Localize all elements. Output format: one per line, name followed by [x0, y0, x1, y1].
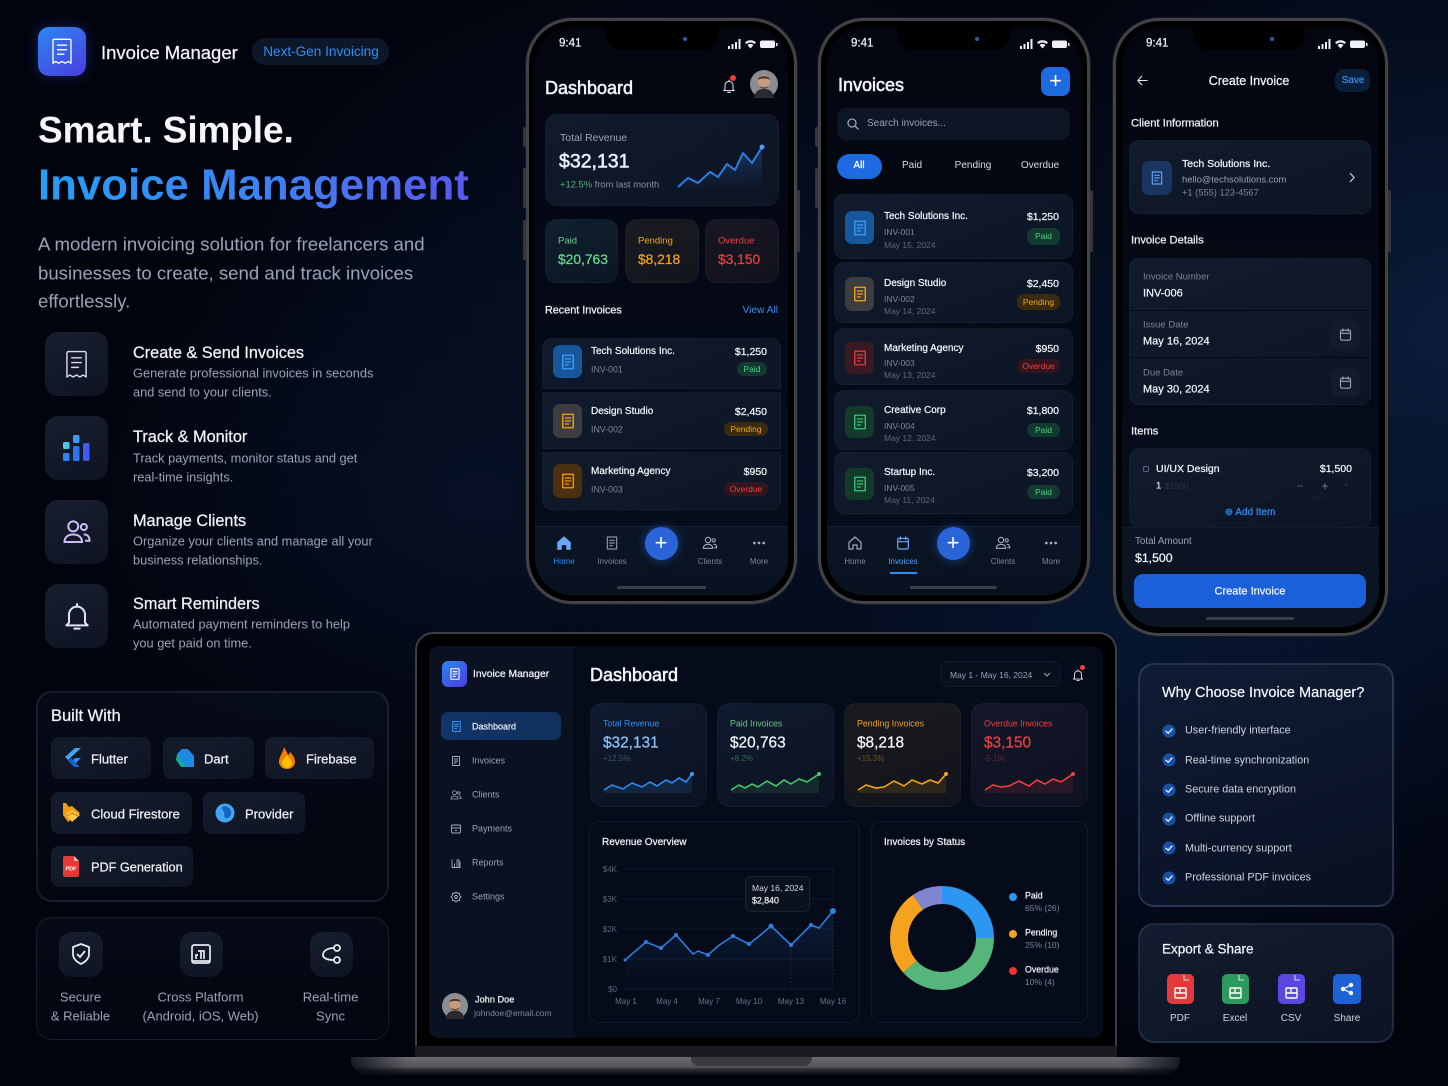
- invoice row: INV-001: [591, 365, 623, 375]
- create invoice button: [1134, 574, 1366, 608]
- highlight: real-time sync: Sync: [316, 1008, 345, 1023]
- invoice row: $950: [1036, 343, 1059, 355]
- invoice row: $1,250: [735, 346, 767, 358]
- highlight: cross platform: Cross Platform: [158, 989, 243, 1004]
- items card: ⊕ Add Item: [1225, 507, 1275, 518]
- search bar: [837, 108, 1070, 140]
- invoice row: Creative Corp: [884, 405, 946, 416]
- chip: Firebase: Firebase: [306, 752, 357, 766]
- invoice details card: INV-006: [1143, 288, 1183, 300]
- save pill: [1335, 69, 1370, 92]
- line chart: [602, 865, 847, 1006]
- create invoice button: Create Invoice: [1215, 586, 1285, 598]
- chip: Flutter: Flutter: [91, 752, 128, 766]
- invoice row: [542, 392, 781, 449]
- sidebar: Dashboard: [472, 722, 516, 732]
- donut legend: 65% (26): [1025, 903, 1060, 913]
- line chart: May 7: [698, 997, 720, 1006]
- invoice row: Paid: [743, 364, 760, 374]
- invoice row: INV-002: [884, 294, 915, 304]
- brand name: Invoice Manager: [101, 42, 238, 63]
- benefit list: User-friendly interface: [1185, 725, 1291, 737]
- invoice row: INV-001: [884, 227, 915, 237]
- client card: [1129, 140, 1371, 214]
- benefit list: Professional PDF invoices: [1185, 872, 1311, 884]
- headline: Smart. Simple.: [38, 110, 294, 150]
- feature: smart reminders: Smart Reminders: [133, 595, 260, 613]
- export: CSV: [1278, 974, 1305, 1024]
- invoice row: Tech Solutions Inc.: [884, 211, 968, 222]
- add button: +: [1049, 68, 1062, 93]
- donut legend: Paid: [1025, 891, 1043, 901]
- invoice details card: Invoice Number: [1143, 271, 1210, 282]
- invoice row: INV-003: [884, 358, 915, 368]
- items card: ◦: [1344, 480, 1348, 491]
- feature: smart reminders: [45, 584, 350, 651]
- chart panel: invoices by status: Invoices by Status: [884, 837, 965, 848]
- feature: manage clients: Manage Clients: [133, 512, 246, 530]
- chip: Provider: Provider: [245, 806, 293, 822]
- invoice row: Design Studio: [884, 278, 946, 289]
- feature: smart reminders: Automated payment reminders to help: [133, 617, 350, 632]
- panel heading: Export & Share: [1162, 941, 1254, 956]
- export: CSV: CSV: [1281, 1013, 1301, 1024]
- sidebar: Payments: [472, 824, 512, 834]
- sidebar: Invoice Manager: [473, 669, 549, 680]
- laptop: base: [351, 1046, 1180, 1075]
- invoice row: [834, 262, 1073, 323]
- chip: PDF Generation: PDF: [66, 866, 76, 872]
- export: Excel: [1222, 974, 1249, 1024]
- invoice details card: May 16, 2024: [1143, 336, 1210, 348]
- revenue card: Total Revenue: [560, 132, 627, 144]
- phone: dashboard screen: [526, 18, 797, 604]
- invoice details card: May 30, 2024: [1143, 384, 1210, 396]
- line chart: May 4: [656, 997, 678, 1006]
- invoice row: May 11, 2024: [884, 495, 935, 505]
- panel: export and share: [1138, 923, 1394, 1043]
- status bar: [1146, 37, 1368, 49]
- chip: PDF Generation: [51, 846, 193, 887]
- tagline pill: [252, 38, 389, 65]
- feature: manage clients: business relationships.: [133, 553, 262, 568]
- page title: Dashboard: [590, 665, 678, 685]
- stat: overdue: [705, 219, 779, 283]
- date range picker: May 1 - May 16, 2024: [950, 670, 1032, 680]
- stat: paid: [545, 219, 618, 283]
- chart panel: invoices by status: [871, 821, 1088, 1023]
- highlight: cross platform: (Android, iOS, Web): [142, 1008, 259, 1023]
- client card: Tech Solutions Inc.: [1182, 158, 1270, 170]
- invoice row: May 12, 2024: [884, 433, 936, 443]
- stat card: total revenue: $32,131: [603, 734, 659, 751]
- tagline pill: Next-Gen Invoicing: [263, 44, 379, 59]
- stat card: overdue invoices: [971, 703, 1088, 807]
- revenue card: +12.5% from last month: [560, 178, 659, 189]
- feature: create and send: Generate professional invoices in seconds: [133, 366, 373, 381]
- sidebar: Clients: [472, 790, 500, 800]
- bottom navigation: More: [750, 557, 768, 566]
- status bar: 9:41: [1146, 37, 1168, 49]
- chip: PDF Generation: PDF Generation: [91, 861, 183, 875]
- invoice row: Design Studio: [591, 406, 653, 417]
- feature: track and monitor: Track payments, monitor status and get: [133, 451, 357, 466]
- phone: invoices screen: [818, 18, 1090, 604]
- bottom navigation: Invoices: [597, 557, 627, 566]
- revenue card: [545, 114, 779, 206]
- sidebar: Reports: [472, 858, 504, 868]
- header: logo and badge: [30, 19, 389, 84]
- client card: hello@techsolutions.com: [1182, 173, 1286, 184]
- chart panel: revenue overview: Revenue Overview: [602, 837, 686, 848]
- donut legend: 25% (10): [1025, 940, 1060, 950]
- donut legend: Overdue: [1025, 965, 1059, 975]
- bottom navigation: [827, 526, 1081, 595]
- export: PDF: [1167, 974, 1194, 1024]
- bottom navigation: +: [655, 530, 667, 555]
- donut chart: [890, 886, 994, 990]
- revenue sparkline: [677, 144, 764, 188]
- invoice details card: [1129, 258, 1371, 405]
- total and action footer: [1122, 527, 1379, 627]
- invoice row: INV-005: [884, 483, 915, 493]
- stat card: paid invoices: $20,763: [730, 734, 786, 751]
- section heading: View All: [742, 305, 778, 316]
- stat: paid: Paid: [558, 235, 577, 246]
- notification bell: [1072, 665, 1085, 681]
- sidebar: [429, 646, 573, 1038]
- benefit list: [1162, 724, 1311, 884]
- line chart: May 1: [615, 997, 637, 1006]
- invoice row: [542, 338, 781, 389]
- bottom navigation: [535, 526, 788, 595]
- donut legend: Pending: [1025, 928, 1057, 938]
- chip: Firebase: [265, 737, 374, 779]
- highlight: secure: [51, 932, 110, 1023]
- sidebar active item: [441, 712, 561, 740]
- line chart: $1K: [603, 955, 618, 964]
- donut legend: [1009, 891, 1060, 987]
- filter tabs: Paid: [902, 160, 922, 171]
- screen title: Create Invoice: [1209, 74, 1289, 88]
- date range picker: [940, 661, 1061, 687]
- invoice row: [834, 328, 1073, 385]
- stat: pending: $8,218: [638, 252, 680, 267]
- items card: $1,500: [1320, 463, 1352, 475]
- screen title: Invoices: [838, 75, 904, 95]
- invoice row: May 14, 2024: [884, 306, 936, 316]
- line chart: $4K: [603, 865, 618, 874]
- line chart: May 13: [778, 997, 805, 1006]
- items card: −: [1296, 479, 1304, 493]
- headline: Invoice Management: [38, 161, 469, 210]
- chip: Dart: Dart: [204, 752, 229, 766]
- chip: Dart: [163, 737, 254, 779]
- filter tabs: Overdue: [1021, 160, 1059, 171]
- feature: create and send: Create & Send Invoices: [133, 344, 304, 362]
- heading: invoice details: Invoice Details: [1131, 234, 1204, 246]
- stat card: overdue invoices: Overdue Invoices: [984, 719, 1052, 729]
- line chart: $3K: [603, 895, 618, 904]
- user profile: [442, 993, 468, 1019]
- notification bell: [723, 75, 736, 93]
- benefit list: Secure data encryption: [1185, 784, 1296, 796]
- invoice row: $1,800: [1027, 405, 1059, 417]
- invoice row: INV-002: [591, 425, 623, 435]
- invoice row: Pending: [1023, 297, 1054, 307]
- export: Share: Share: [1334, 1013, 1360, 1024]
- stat: pending: Pending: [638, 235, 673, 246]
- intro paragraph: [38, 234, 425, 312]
- sidebar: johndoe@email.com: [474, 1008, 552, 1018]
- feature: smart reminders: you get paid on time.: [133, 636, 252, 651]
- line chart: May 10: [736, 997, 763, 1006]
- invoice row: INV-004: [884, 421, 915, 431]
- stat card: overdue invoices: -5.1%: [984, 754, 1005, 763]
- line chart: $0: [608, 985, 618, 994]
- items card: UI/UX Design: [1156, 463, 1220, 475]
- invoice row: [542, 452, 781, 510]
- bottom navigation: Home: [553, 557, 575, 566]
- bottom navigation: +: [947, 530, 959, 555]
- chart tooltip: [745, 876, 810, 912]
- stat card: pending invoices: +15.3%: [857, 754, 884, 763]
- items card: [1129, 448, 1371, 528]
- invoice row: $1,250: [1027, 211, 1059, 223]
- chip: Flutter: [51, 737, 151, 779]
- chip: Cloud Firestore: Cloud Firestore: [91, 806, 180, 822]
- chart tooltip: May 16, 2024: [752, 883, 804, 893]
- invoice row: Tech Solutions Inc.: [591, 346, 675, 357]
- benefit list: Offline support: [1185, 813, 1255, 825]
- feature: create and send: [45, 332, 373, 400]
- stat: pending: [625, 219, 699, 283]
- client card: +1 (555) 123-4567: [1182, 187, 1259, 197]
- invoice details card: Due Date: [1143, 367, 1183, 378]
- highlight: real-time sync: Real-time: [303, 989, 358, 1004]
- status bar: 9:41: [559, 37, 581, 49]
- bottom navigation: Invoices: [888, 557, 918, 566]
- stat card: paid invoices: Paid Invoices: [730, 719, 782, 729]
- feature: create and send: and send to your clients.: [133, 385, 272, 400]
- intro paragraph: A modern invoicing solution for freelancers and: [38, 234, 425, 255]
- invoice row: $950: [744, 466, 767, 478]
- feature: track and monitor: real-time insights.: [133, 470, 233, 485]
- stat card: total revenue: Total Revenue: [603, 719, 659, 729]
- chip: Cloud Firestore: [51, 792, 192, 834]
- back arrow: [1137, 76, 1148, 86]
- highlight: real-time sync: [303, 932, 358, 1023]
- benefit list: Real-time synchronization: [1185, 755, 1309, 767]
- invoice row: [834, 390, 1073, 450]
- invoice row: [834, 194, 1073, 259]
- save pill: Save: [1342, 75, 1364, 86]
- invoice row: INV-003: [591, 485, 623, 495]
- invoice row: Marketing Agency: [591, 466, 670, 477]
- heading: client information: Client Information: [1131, 117, 1219, 129]
- export: Excel: Excel: [1223, 1013, 1247, 1024]
- stat card: pending invoices: Pending Invoices: [857, 719, 924, 729]
- add button: [1041, 67, 1070, 96]
- export: Share: [1333, 974, 1361, 1024]
- highlight: cross platform: [142, 932, 259, 1023]
- invoice row: $2,450: [1027, 278, 1059, 290]
- invoice row: Paid: [1035, 425, 1052, 435]
- invoice row: $3,200: [1027, 467, 1059, 479]
- stat card: overdue invoices: $3,150: [984, 734, 1031, 751]
- user avatar: [750, 70, 778, 98]
- stat card: pending invoices: [844, 703, 961, 807]
- panel heading: Why Choose Invoice Manager?: [1162, 685, 1364, 701]
- bottom navigation: Home: [844, 557, 866, 566]
- invoice row: Startup Inc.: [884, 467, 935, 478]
- section heading: Recent Invoices: [545, 305, 622, 317]
- invoice row: Overdue: [730, 484, 762, 494]
- phone: create invoice screen: [1113, 18, 1388, 636]
- donut legend: 10% (4): [1025, 977, 1055, 987]
- panel: built with: [36, 691, 389, 902]
- feature: track and monitor: [45, 416, 358, 485]
- stat: paid: $20,763: [558, 252, 608, 267]
- total and action footer: Total Amount: [1135, 536, 1192, 547]
- status bar: 9:41: [851, 37, 873, 49]
- stat card: pending invoices: $8,218: [857, 734, 904, 751]
- invoice row: $2,450: [735, 406, 767, 418]
- total and action footer: $1,500: [1135, 551, 1173, 565]
- feature: manage clients: [45, 500, 373, 568]
- stat card: total revenue: +12.5%: [603, 754, 630, 763]
- invoice row: May 15, 2024: [884, 240, 936, 250]
- headline: [38, 110, 469, 210]
- filter tabs: Pending: [955, 160, 991, 171]
- sidebar: Invoices: [472, 756, 505, 766]
- stat card: paid invoices: [717, 703, 834, 807]
- chip: Provider: [203, 792, 305, 834]
- stat card: paid invoices: +8.2%: [730, 754, 753, 763]
- intro paragraph: businesses to create, send and track invoices: [38, 263, 413, 284]
- invoice details card: Issue Date: [1143, 319, 1188, 330]
- sidebar: Settings: [472, 892, 505, 902]
- highlight: secure: Secure: [60, 989, 101, 1004]
- bottom navigation: More: [1042, 557, 1060, 566]
- feature: manage clients: Organize your clients and manage all your: [133, 534, 373, 549]
- panel: why choose: [1138, 663, 1394, 907]
- laptop: dashboard screen: [415, 632, 1117, 1046]
- heading: items: Items: [1131, 425, 1158, 437]
- invoice row: Marketing Agency: [884, 343, 964, 354]
- line chart: $2K: [603, 925, 618, 934]
- intro paragraph: effortlessly.: [38, 291, 130, 312]
- screen title: Dashboard: [545, 78, 633, 98]
- invoice row: Paid: [1035, 487, 1052, 497]
- export: PDF: PDF: [1170, 1013, 1190, 1024]
- invoice row: Paid: [1035, 231, 1052, 241]
- chart panel: revenue overview: [589, 821, 860, 1023]
- bottom navigation: Clients: [698, 557, 722, 566]
- bottom navigation: Clients: [991, 557, 1015, 566]
- app logo icon: [38, 27, 86, 76]
- sidebar logo: [442, 661, 467, 687]
- stat: overdue: $3,150: [718, 252, 760, 267]
- chart tooltip: $2,840: [752, 896, 779, 906]
- status bar: [559, 37, 778, 49]
- invoice row: Overdue: [1022, 361, 1055, 371]
- feature: track and monitor: Track & Monitor: [133, 428, 247, 446]
- search bar: Search invoices...: [867, 118, 946, 129]
- panel: highlights: [36, 917, 389, 1040]
- filter tabs: [837, 154, 1059, 179]
- stat: overdue: Overdue: [718, 235, 754, 246]
- revenue card: $32,131: [559, 150, 630, 172]
- status bar: [851, 37, 1070, 49]
- items card: $1500: [1165, 481, 1189, 491]
- invoice row: Pending: [730, 424, 762, 434]
- line chart: May 16: [820, 997, 847, 1006]
- sidebar: John Doe: [475, 994, 514, 1004]
- invoice row: [834, 452, 1073, 514]
- panel heading: Built With: [51, 707, 121, 725]
- invoice row: May 13, 2024: [884, 370, 936, 380]
- items card: +: [1321, 479, 1329, 493]
- benefit list: Multi-currency support: [1185, 843, 1292, 855]
- highlight: secure: & Reliable: [51, 1008, 110, 1023]
- section heading: [545, 305, 778, 317]
- filter tabs: All: [853, 160, 865, 171]
- items card: 1: [1156, 480, 1161, 491]
- stat card: total revenue: [590, 703, 707, 807]
